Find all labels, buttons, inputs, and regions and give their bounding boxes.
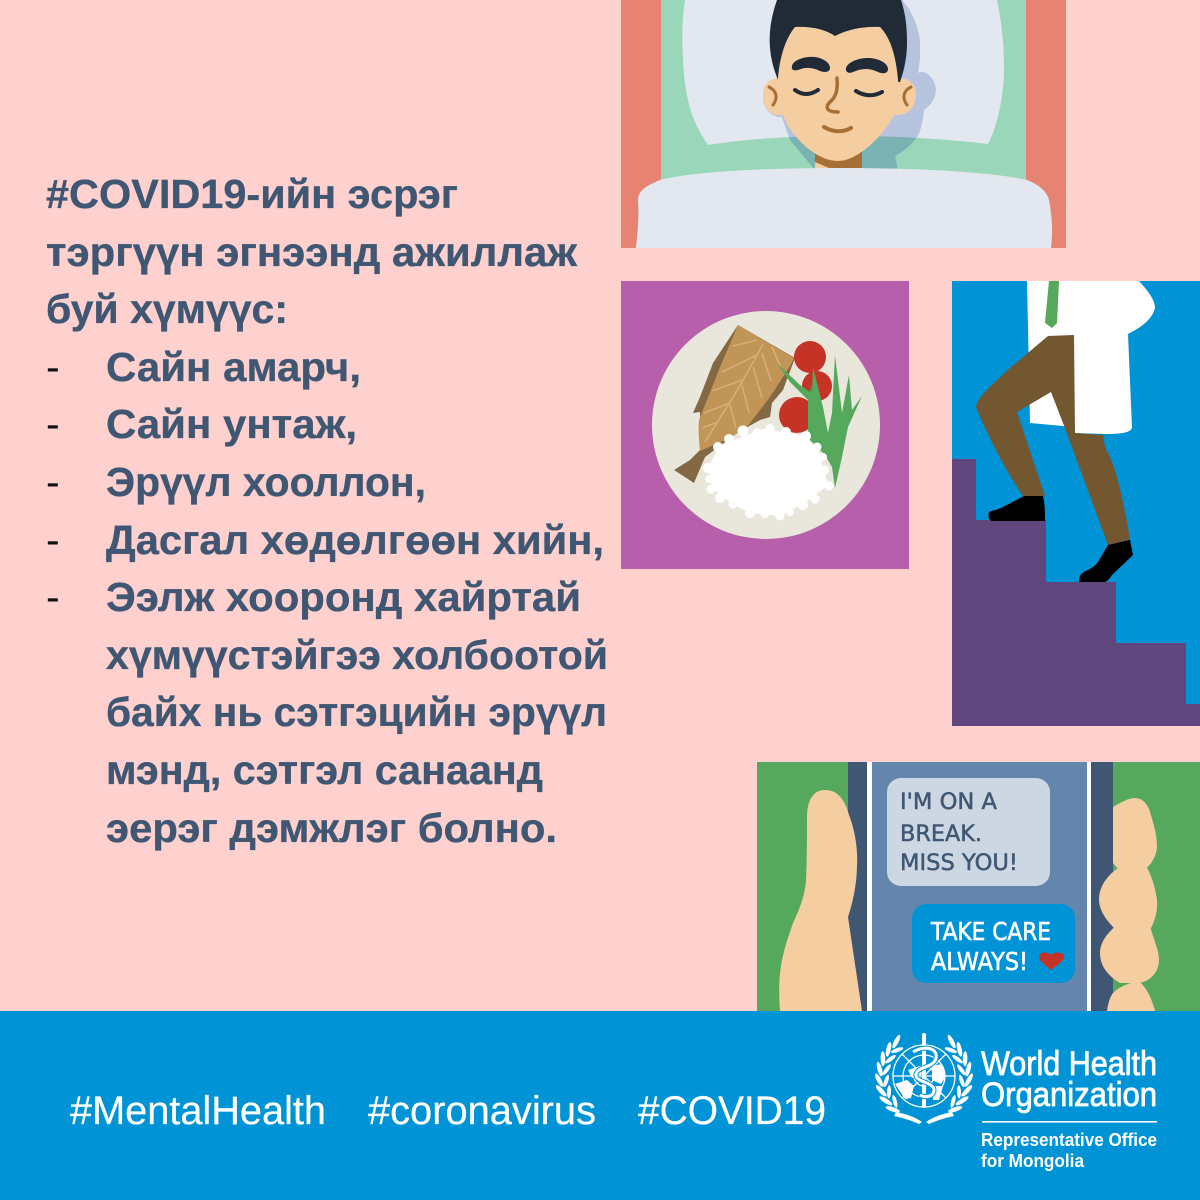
pillow: [682, 0, 1004, 145]
shoes: [988, 496, 1133, 582]
WHO wordmark: World Health: [981, 1045, 1157, 1083]
message bubble: blue: ALWAYS!: [931, 947, 1028, 976]
continents: [895, 1064, 946, 1100]
message bubble: grey: BREAK.: [900, 822, 982, 847]
icon: heart: [1039, 953, 1064, 970]
neck: [815, 152, 862, 168]
thumb: [779, 790, 862, 1011]
panel: phone messages: [757, 762, 1200, 1011]
bullet list: Сайн унтаж,: [106, 401, 357, 447]
message bubble: grey: I'M ON A: [900, 790, 997, 815]
heading: #COVID19-ийн эсрэг: [46, 171, 458, 217]
bullet list: мэнд, сэтгэл санаанд: [106, 747, 543, 793]
bullet list: -: [46, 517, 60, 563]
head shadow: [763, 0, 936, 170]
footer band: [0, 1011, 1200, 1200]
bullet list: -: [46, 459, 60, 505]
blanket: [636, 168, 1052, 248]
bullet list: -: [46, 401, 60, 447]
bullet list: Сайн амарч,: [106, 344, 361, 390]
hashtags: #COVID19: [638, 1089, 826, 1133]
plate: [652, 311, 880, 539]
main message text: [46, 171, 608, 851]
greens: [777, 355, 862, 488]
bullet list: эерэг дэмжлэг болно.: [106, 805, 557, 851]
message bubble: blue: TAKE CARE: [930, 917, 1051, 946]
face: [778, 27, 898, 161]
globe: [893, 1045, 955, 1107]
heading: [46, 171, 578, 332]
hair: [770, 0, 907, 82]
stairs: [952, 459, 1200, 726]
message bubble: grey: MISS YOU!: [900, 851, 1018, 876]
WHO wordmark: for Mongolia: [981, 1151, 1085, 1171]
phone body: [848, 762, 1113, 1011]
WHO emblem: [873, 1033, 975, 1124]
heading: буй хүмүүс:: [46, 286, 288, 332]
heading: тэргүүн эгнээнд ажиллаж: [46, 229, 578, 275]
bullet list: -: [46, 344, 60, 390]
bullet list: хүмүүстэйгээ холбоотой: [106, 632, 608, 678]
WHO wordmark: Organization: [981, 1076, 1157, 1114]
panel: climbing stairs: [952, 281, 1200, 726]
WHO wordmark: [981, 1045, 1157, 1171]
panel: healthy meal: [621, 281, 909, 569]
panel: sleeping person: [621, 0, 1066, 248]
hashtags: [70, 1089, 826, 1133]
bullet list: байх нь сэтгэцийн эрүүл: [106, 689, 607, 735]
hashtags: #MentalHealth: [70, 1089, 326, 1133]
message bubble: grey: [887, 778, 1050, 886]
ears: [763, 78, 916, 115]
WHO wordmark: Representative Office: [981, 1130, 1157, 1150]
bullet list: Дасгал хөдөлгөөн хийн,: [106, 517, 604, 563]
bullet list: -: [46, 574, 60, 620]
bullet list: Эрүүл хооллон,: [106, 459, 426, 505]
wreath: [873, 1034, 975, 1124]
bullet list: Ээлж хооронд хайртай: [106, 574, 581, 620]
tomatoes: [779, 341, 832, 433]
trousers: [976, 335, 1130, 545]
rod and serpent: [913, 1033, 936, 1108]
fish: [674, 325, 795, 483]
rice: [703, 424, 834, 520]
message bubble: blue: [912, 904, 1075, 983]
tie: [1045, 281, 1059, 328]
bullet list: [46, 344, 608, 851]
fingers: [1099, 798, 1159, 1011]
lab coat: [1027, 281, 1155, 434]
hashtags: #coronavirus: [368, 1089, 596, 1133]
facial features: [769, 57, 911, 131]
